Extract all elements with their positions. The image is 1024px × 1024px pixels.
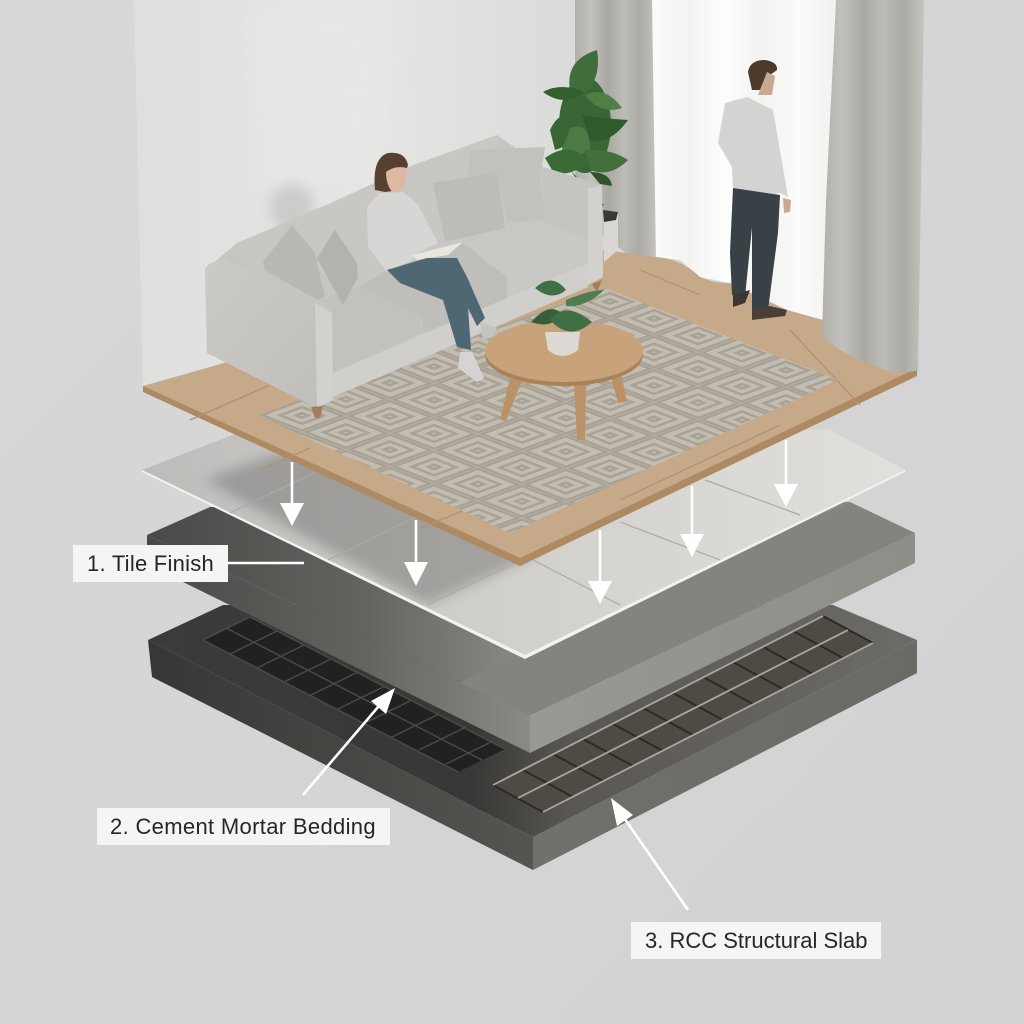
wall shadow behind sofa	[270, 184, 314, 232]
slab layer: RCC structural slab	[148, 605, 917, 870]
coffee table with plant	[485, 280, 643, 440]
floor: wood planks	[143, 250, 917, 566]
plant by the wall	[543, 50, 628, 262]
woman reading on the sofa	[367, 153, 497, 382]
man standing at the window	[718, 60, 791, 320]
wall	[134, 0, 620, 388]
mortar layer: cement mortar bedding	[147, 502, 915, 753]
potted plant on table	[531, 280, 604, 356]
left curtain	[575, 0, 656, 262]
label: 1. Tile Finish	[73, 545, 304, 582]
label: 2. Cement Mortar Bedding	[97, 688, 395, 845]
tile layer: tile finish	[142, 430, 905, 659]
rug	[258, 288, 838, 533]
right curtain	[822, 0, 924, 373]
label: 3. RCC Structural Slab	[611, 798, 881, 959]
label: 3. RCC Structural Slab: 3. RCC Structural Slab	[645, 928, 868, 953]
wall light patch	[250, 0, 390, 190]
sofa	[205, 135, 603, 418]
label: 1. Tile Finish: 1. Tile Finish	[87, 551, 214, 576]
reinforcement mesh	[203, 616, 873, 812]
window and sheer curtain	[652, 0, 836, 322]
label: 2. Cement Mortar Bedding: 2. Cement Mortar Bedding	[110, 814, 376, 839]
sofa cushions	[263, 147, 545, 305]
arrows: load transfer downward	[280, 440, 798, 604]
